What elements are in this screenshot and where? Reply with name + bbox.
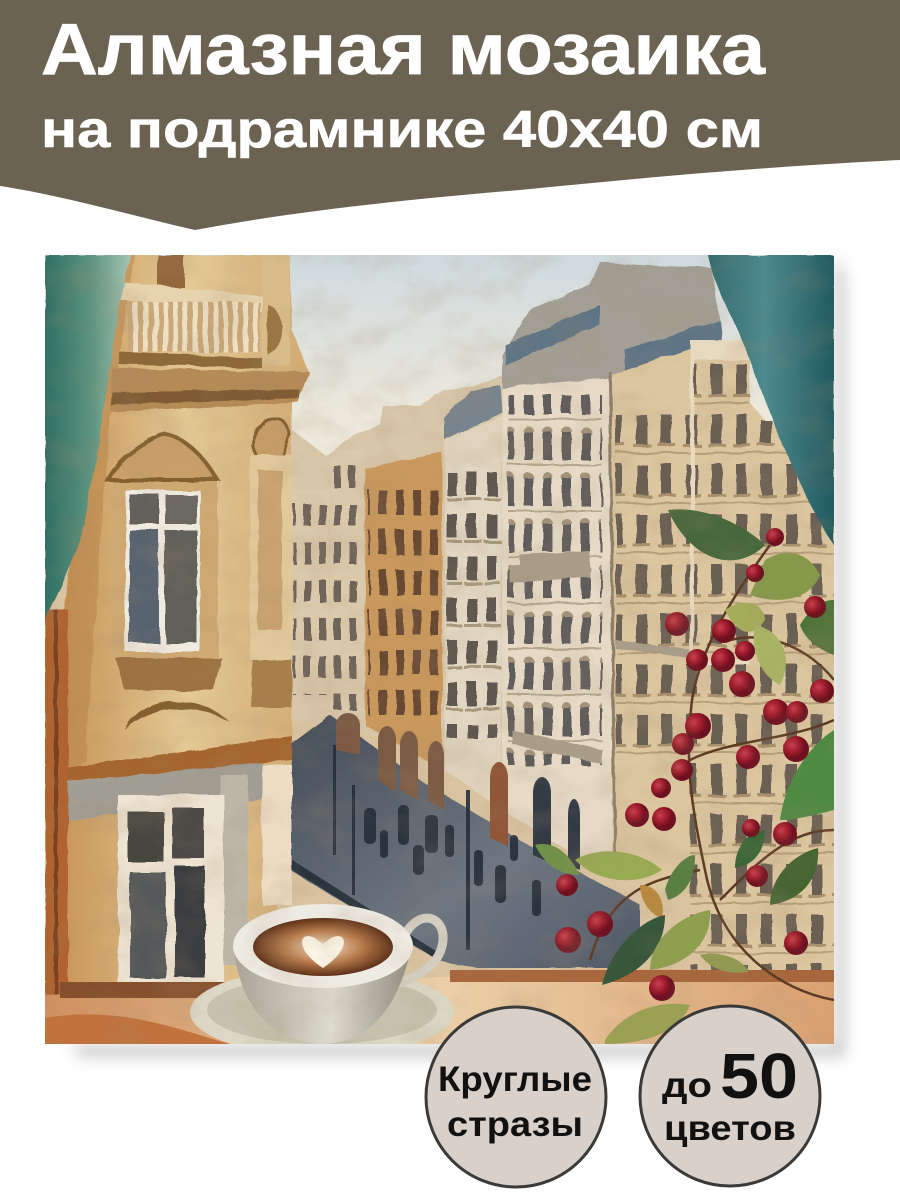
tall facades — [502, 262, 835, 975]
window sill — [45, 968, 834, 1044]
branch — [590, 545, 834, 1000]
cornice — [65, 736, 292, 782]
upper balcony — [118, 282, 264, 368]
header banner — [0, 0, 900, 230]
badge: up to 50 colours — [640, 1006, 820, 1186]
subtitle: на подрамнике 40х40 см — [41, 101, 763, 159]
canvas shadow — [70, 255, 846, 1058]
upper window — [112, 482, 218, 658]
base tone — [45, 522, 834, 995]
arcades — [336, 713, 580, 870]
left curtain — [45, 255, 132, 620]
title: Алмазная мозаика — [41, 10, 766, 90]
distant street buildings — [285, 375, 505, 810]
badge: up to 50 colours: цветов — [664, 1109, 796, 1148]
painting — [45, 255, 835, 1056]
badge: round rhinestones — [426, 1007, 606, 1187]
watercolour wash — [45, 255, 834, 1044]
ornament pediment — [108, 434, 218, 480]
sky — [45, 255, 834, 482]
street — [290, 715, 640, 968]
berries — [555, 528, 834, 1001]
badge: round rhinestones: Круглые — [438, 1060, 592, 1099]
window frame left — [45, 610, 68, 1000]
lower window — [118, 795, 224, 985]
badge: round rhinestones: стразы — [447, 1105, 583, 1144]
badge: up to 50 colours: 50 — [720, 1040, 798, 1112]
leaves — [535, 509, 834, 1044]
right curtain — [708, 255, 834, 545]
coffee cup and saucer — [190, 904, 454, 1056]
badge: up to 50 colours: до — [662, 1066, 712, 1105]
pedestrians — [292, 745, 541, 960]
left building — [45, 255, 310, 1000]
